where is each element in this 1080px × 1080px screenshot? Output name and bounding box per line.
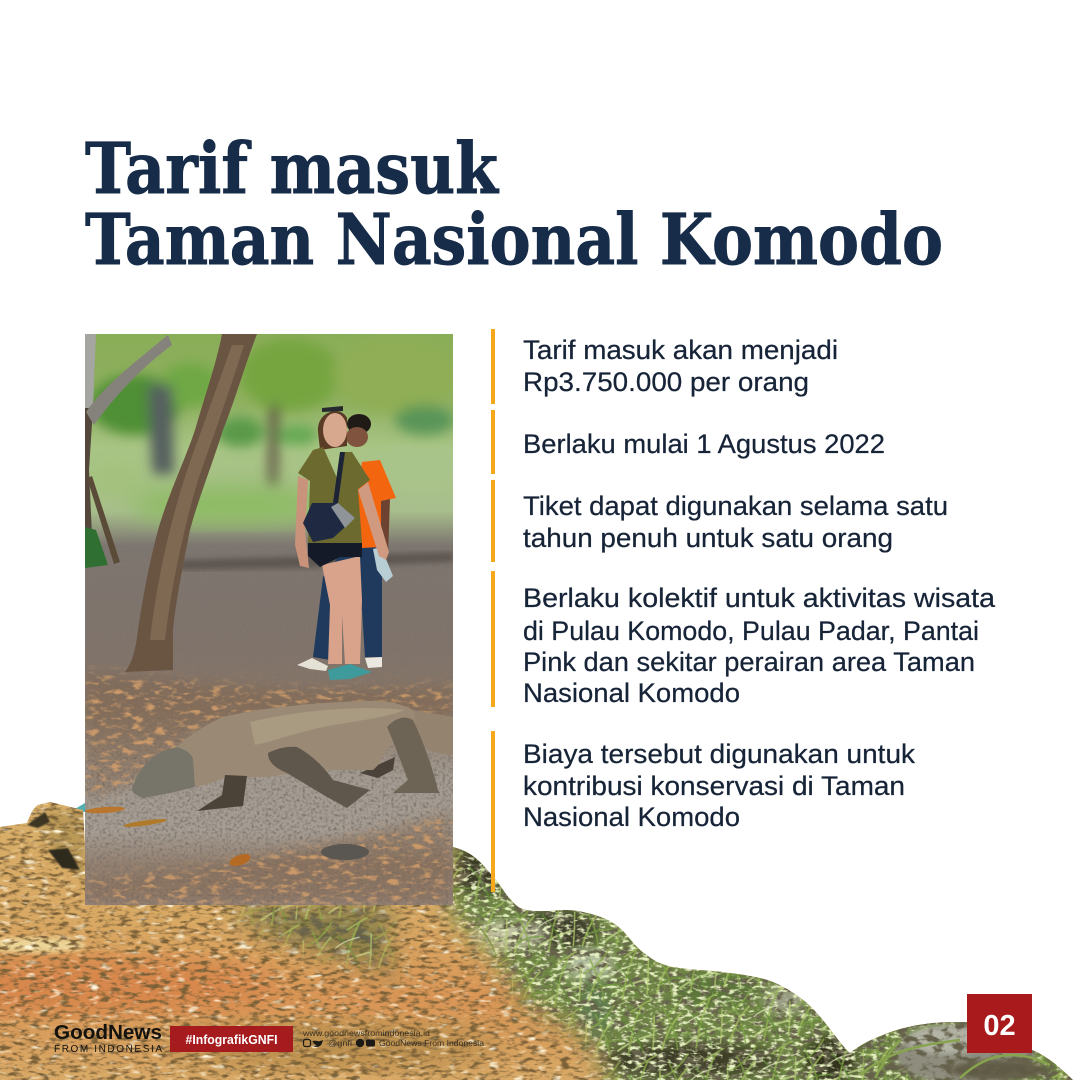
title bbox=[85, 127, 943, 281]
hashtag badge: #InfografikGNFI bbox=[186, 1033, 278, 1047]
divider bars bbox=[491, 329, 495, 892]
text block: coverage: Nasional Komodo bbox=[523, 678, 740, 708]
grass field bbox=[94, 468, 310, 532]
text block: ticket validity: Tiket dapat digunakan selama satu bbox=[523, 491, 948, 521]
text block: coverage bbox=[523, 583, 996, 708]
social links: GoodNews From Indonesia bbox=[379, 1038, 484, 1048]
text block: use of funds: kontribusi konservasi di Taman bbox=[523, 771, 905, 801]
background trees bbox=[90, 337, 457, 488]
text block: ticket validity bbox=[523, 491, 948, 553]
page number badge: 02 bbox=[983, 1010, 1016, 1042]
social icons bbox=[304, 1039, 375, 1047]
social links: www.goodnewsfromindonesia.id bbox=[302, 1028, 430, 1038]
title: Tarif masuk bbox=[85, 127, 499, 210]
title: Taman Nasional Komodo bbox=[85, 198, 943, 281]
page number badge bbox=[967, 994, 1032, 1053]
hashtag badge bbox=[170, 1026, 293, 1052]
text block: coverage: di Pulau Komodo, Pulau Padar, Pantai bbox=[523, 616, 979, 646]
text block: use of funds bbox=[523, 739, 916, 832]
text block: price bbox=[523, 335, 838, 397]
gravel and leaf litter bbox=[85, 545, 453, 905]
large tree trunk bbox=[125, 334, 257, 672]
social links bbox=[302, 1028, 484, 1048]
text block: price: Rp3.750.000 per orang bbox=[523, 367, 809, 397]
logo: GoodNews from Indonesia bbox=[54, 1022, 162, 1055]
logo: GoodNews from Indonesia: FROM INDONESIA bbox=[54, 1044, 162, 1055]
woman tourist bbox=[295, 406, 389, 680]
text block: start date: Berlaku mulai 1 Agustus 2022 bbox=[523, 429, 885, 459]
text block: use of funds: Biaya tersebut digunakan untuk bbox=[523, 739, 916, 769]
man in orange bbox=[297, 414, 396, 671]
Komodo dragon bbox=[132, 701, 453, 811]
left bare tree bbox=[85, 334, 172, 568]
photo: tourists and Komodo dragon bbox=[85, 334, 470, 905]
social links: @gnfi bbox=[328, 1038, 352, 1048]
text block: use of funds: Nasional Komodo bbox=[523, 802, 740, 832]
text block: coverage: Berlaku kolektif untuk aktivitas wisata bbox=[523, 583, 996, 613]
logo: GoodNews from Indonesia: GoodNews bbox=[54, 1022, 162, 1044]
ground landscape illustration bbox=[0, 790, 1080, 1080]
text block: price: Tarif masuk akan menjadi bbox=[523, 335, 838, 365]
text block: ticket validity: tahun penuh untuk satu orang bbox=[523, 523, 893, 553]
text block: coverage: Pink dan sekitar perairan area Taman bbox=[523, 647, 975, 677]
